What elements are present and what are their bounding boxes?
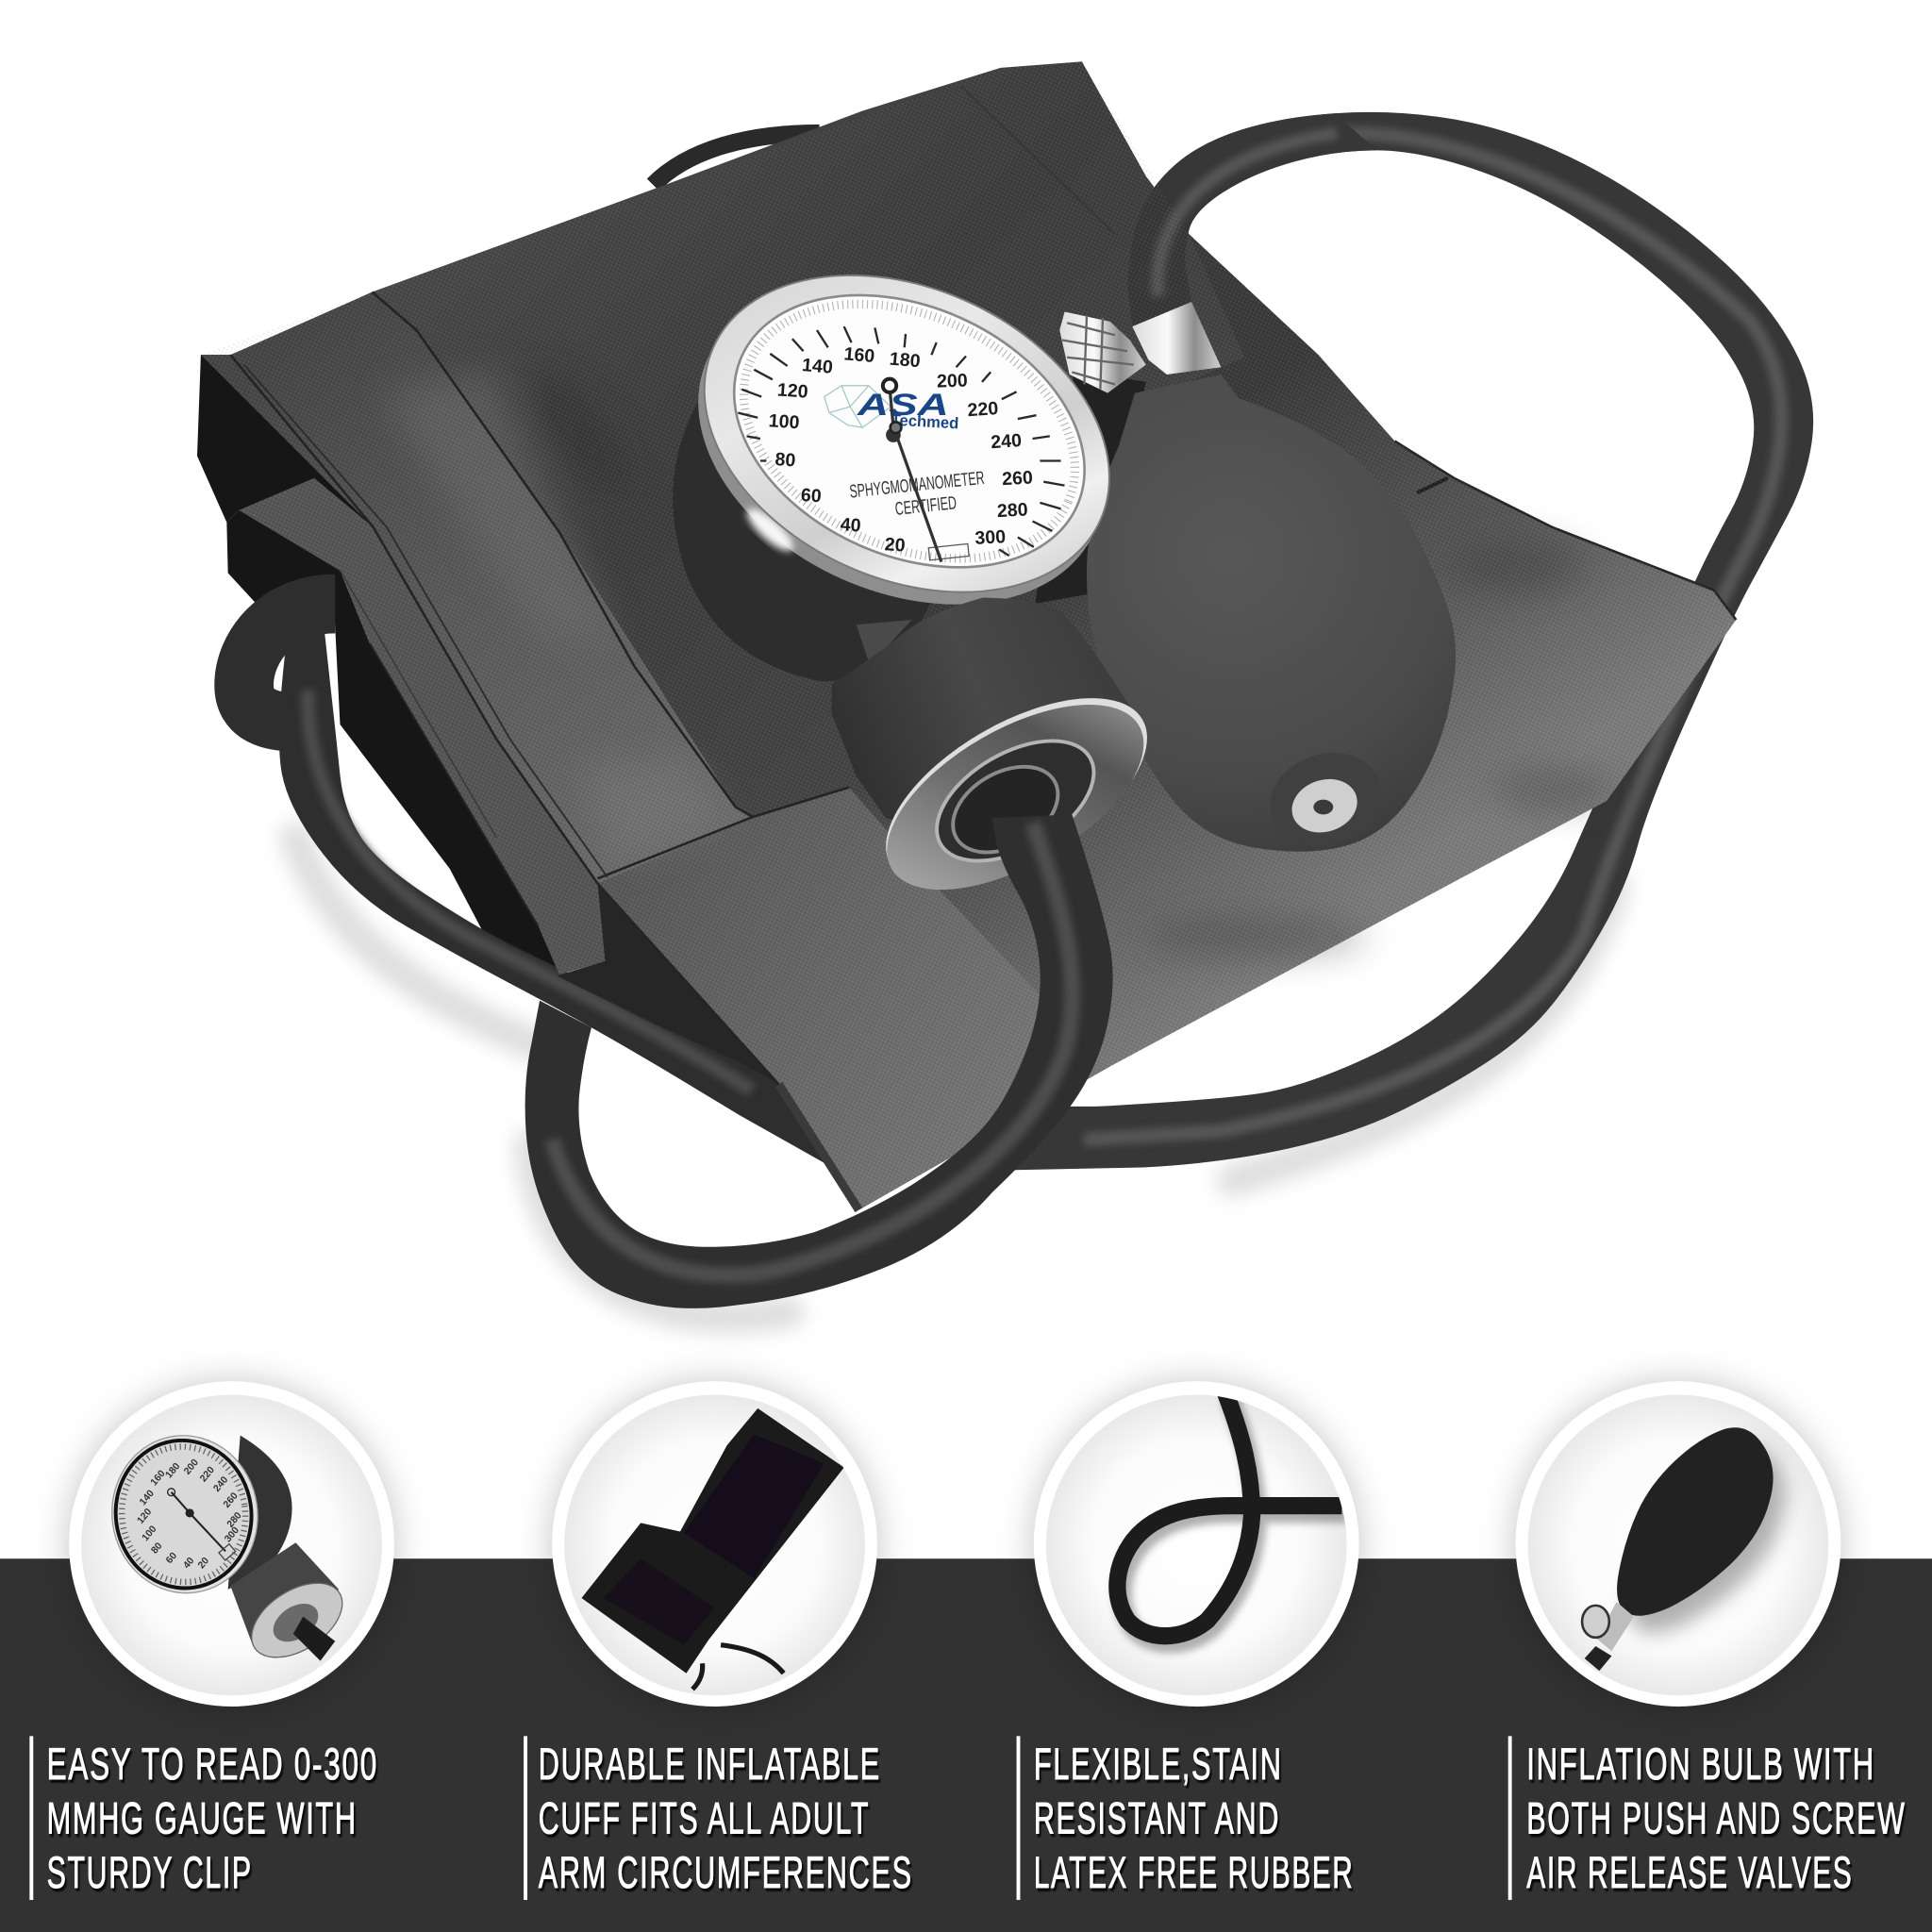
brand logo <box>857 387 959 432</box>
inflation bulb <box>1087 375 1456 860</box>
gauge scale numbers: 80 <box>150 1541 165 1556</box>
gauge scale numbers: 100 <box>141 1524 159 1543</box>
cuff pleat flap <box>239 478 605 974</box>
gauge scale numbers: 300 <box>223 1525 242 1544</box>
caption: DURABLE INFLATABLE <box>539 1739 881 1789</box>
brand logo: Techmed <box>891 411 959 432</box>
panel: inflation bulb feature <box>1508 1381 1907 1900</box>
minor tick ring <box>704 255 1115 608</box>
brand logo: ASA <box>857 387 949 422</box>
thumbnail circle <box>1514 1381 1842 1709</box>
gauge scale numbers: 280 <box>225 1510 244 1530</box>
sphygmomanometer certified text <box>848 468 986 520</box>
gauge back housing <box>673 370 986 681</box>
dial scale numbers: 200 <box>937 371 968 392</box>
dial scale numbers <box>768 343 1034 557</box>
gauge scale numbers: 60 <box>164 1551 179 1566</box>
bulb connector and screw valve <box>1059 302 1221 393</box>
dial scale numbers: 140 <box>801 355 834 378</box>
dial scale numbers: 220 <box>967 398 999 421</box>
major ticks <box>738 326 1064 556</box>
caption: MMHG GAUGE WITH <box>47 1793 358 1843</box>
chrome side highlight <box>741 503 799 557</box>
gauge scale numbers <box>136 1457 244 1571</box>
icon: inflation bulb <box>1582 1427 1786 1671</box>
icon: rubber tube loop <box>1117 1391 1347 1643</box>
gauge dial <box>648 215 1159 665</box>
dial scale numbers: 160 <box>843 343 875 367</box>
thumbnail circle <box>551 1381 878 1709</box>
dial face <box>691 242 1127 620</box>
bulb valve <box>1257 739 1393 860</box>
caption: RESISTANT AND <box>1034 1793 1280 1843</box>
caption: CUFF FITS ALL ADULT <box>539 1793 870 1843</box>
dial scale numbers: 180 <box>889 349 922 372</box>
dial scale numbers: 80 <box>774 449 796 471</box>
thumbnail circle <box>68 1381 395 1709</box>
gauge scale numbers: 220 <box>198 1465 217 1484</box>
caption <box>539 1739 913 1897</box>
sphygmomanometer certified text: CERTIFIED <box>894 492 958 520</box>
gauge barrel <box>832 597 1177 927</box>
cuff lower panel <box>597 788 1109 1210</box>
caption <box>47 1739 378 1897</box>
thumbnail circle <box>1033 1381 1360 1709</box>
left panel sheen <box>382 357 727 862</box>
tube loop at left knot <box>244 604 335 722</box>
panel: rubber tube feature <box>1017 1381 1360 1900</box>
cuff seams <box>230 86 1115 1210</box>
dial scale numbers: 20 <box>884 534 906 557</box>
cuff back wing <box>597 61 1736 1210</box>
gauge scale numbers: 240 <box>212 1474 230 1494</box>
gauge scale numbers: 20 <box>196 1556 211 1571</box>
wing darker patches <box>1146 540 1614 957</box>
icon: gauge <box>111 1435 343 1661</box>
caption divider <box>1508 1736 1512 1900</box>
dial scale numbers: 300 <box>974 526 1007 549</box>
caption <box>1526 1739 1907 1897</box>
caption: LATEX FREE RUBBER <box>1034 1847 1354 1897</box>
dark bottom band <box>0 1558 1932 1932</box>
dial scale numbers: 280 <box>996 499 1028 522</box>
dark under fold near cuff tip <box>557 883 778 1084</box>
cuff dark upper panel <box>372 61 1244 817</box>
gauge scale numbers: 200 <box>182 1457 201 1476</box>
gauge scale numbers: 40 <box>182 1556 197 1571</box>
left rubber tube <box>279 616 838 1171</box>
caption divider <box>524 1736 527 1900</box>
cuff main left panel <box>201 292 753 883</box>
caption: FLEXIBLE,STAIN <box>1034 1739 1283 1789</box>
brand logo network mark <box>824 386 891 427</box>
caption: ARM CIRCUMFERENCES <box>539 1847 913 1897</box>
sphygmomanometer certified text: SPHYGMOMANOMETER <box>848 468 986 503</box>
panel: gauge feature <box>29 1381 395 1900</box>
dark gap between dial and bulb <box>1035 370 1146 604</box>
needle <box>883 379 941 562</box>
dial scale numbers: 120 <box>776 379 808 403</box>
chrome bezel <box>654 215 1159 653</box>
chrome side <box>648 227 1154 665</box>
icon: folded cuff <box>581 1408 844 1690</box>
caption <box>1034 1739 1354 1897</box>
gauge scale numbers: 260 <box>222 1491 241 1510</box>
tube neck over the cuff <box>1127 113 1376 326</box>
caption: STURDY CLIP <box>47 1847 253 1897</box>
caption divider <box>1017 1736 1020 1900</box>
dial scale numbers: 100 <box>768 410 800 433</box>
dial scale numbers: 240 <box>991 430 1023 453</box>
gauge scale numbers: 120 <box>136 1507 154 1526</box>
zero box <box>928 543 969 560</box>
caption divider <box>29 1736 33 1900</box>
chrome coupling <box>1132 302 1221 375</box>
chrome flange <box>857 659 1177 924</box>
back tube arc behind cuff <box>653 133 820 185</box>
long rubber tube <box>986 112 1813 1171</box>
caption: EASY TO READ 0-300 <box>47 1739 378 1789</box>
product photo: blood pressure cuff with gauge and bulb <box>197 61 1813 1317</box>
dial scale numbers: 40 <box>840 514 861 537</box>
dial scale numbers: 260 <box>1002 467 1034 490</box>
gauge scale numbers: 140 <box>138 1489 157 1507</box>
knurled screw valve <box>1059 311 1146 393</box>
dial scale numbers: 60 <box>800 485 823 507</box>
gauge scale numbers: 160 <box>149 1469 168 1488</box>
fabric weave texture <box>201 61 1736 1210</box>
main rubber hose from gauge stem <box>525 814 1113 1308</box>
gauge scale numbers: 180 <box>164 1461 182 1480</box>
panel: cuff feature <box>524 1381 913 1900</box>
cuff black inner opening <box>197 355 605 974</box>
soft ground shadow <box>295 838 1614 1317</box>
